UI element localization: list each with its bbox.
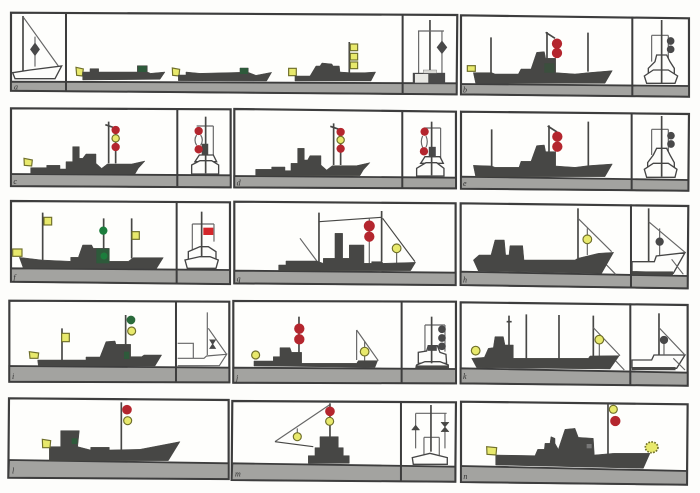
- panel g: ship with two red balls and yellow ball: [234, 202, 456, 285]
- front view: [632, 208, 685, 275]
- front view: [644, 20, 678, 83]
- panel n: ship with yellow flag, signal balls and bow burst: n: [463, 472, 467, 481]
- vessel silhouette: [275, 403, 349, 463]
- red balls: [364, 221, 374, 241]
- ship silhouette: [279, 211, 416, 271]
- boat silhouette: [49, 402, 180, 461]
- green ball: [100, 227, 107, 234]
- front view: [192, 117, 219, 174]
- panel h: ship with yellow ball: [461, 203, 688, 288]
- panel a: sailing vessel, tow and front view: a: [14, 82, 18, 91]
- panel i: ship with flags and green and yellow balls: i: [12, 372, 14, 381]
- yellow flags: [29, 333, 69, 358]
- panel f: ship with yellow flags and green ball: f: [13, 273, 17, 282]
- panel n: ship with yellow flag, signal balls and bow burst: [461, 402, 688, 485]
- signal balls: [609, 405, 620, 426]
- panel m: stepped vessel with derrick, balls and front view: m: [235, 470, 241, 479]
- yellow ball: [392, 244, 401, 253]
- yellow flags: [13, 217, 139, 256]
- yellow flag: [487, 447, 497, 455]
- front view: [644, 116, 677, 177]
- ship silhouette: [473, 208, 616, 274]
- front view: [416, 317, 448, 368]
- yellow flag: [24, 158, 32, 166]
- panel k: four-masted ship with yellow balls: [461, 302, 688, 386]
- ship silhouette: [38, 315, 162, 366]
- red balls: [553, 132, 562, 151]
- yellow balls: [252, 347, 369, 359]
- signal balls: [112, 126, 119, 151]
- panel c: ship with red, yellow, red balls and flag: [11, 108, 231, 187]
- sailing boat with diamond shape: [13, 16, 62, 79]
- signal balls: [123, 405, 132, 425]
- red balls: [295, 324, 304, 344]
- panel m: stepped vessel with derrick, balls and front view: [232, 401, 456, 482]
- panel l: fishing boat with red and yellow balls: l: [12, 467, 15, 476]
- front view: [185, 212, 218, 268]
- panel i: ship with flags and green and yellow balls: [9, 301, 229, 382]
- panel f: ship with yellow flags and green ball: [11, 201, 230, 284]
- front view: [417, 122, 444, 176]
- yellow ball: [583, 235, 592, 244]
- panel g: ship with two red balls and yellow ball: g: [237, 275, 241, 284]
- tow: second vessel: [172, 68, 272, 81]
- panel b: ship with two red balls and yellow flag: [461, 15, 689, 97]
- panel b: ship with two red balls and yellow flag: b: [463, 86, 467, 95]
- tow: first vessel: [76, 66, 165, 80]
- front view: [178, 312, 227, 366]
- signal balls: [337, 128, 344, 152]
- panel k: four-masted ship with yellow balls: k: [463, 372, 467, 381]
- panel l: fishing boat with red and yellow balls: [8, 398, 229, 479]
- ship silhouette: [496, 404, 650, 468]
- signal balls: [127, 316, 136, 335]
- ship silhouette: [254, 317, 378, 367]
- ship silhouette: [472, 314, 624, 370]
- front view: [412, 405, 449, 464]
- yellow burst at bow: [645, 442, 658, 453]
- front view with diamond shape: [413, 20, 447, 83]
- signal balls: [293, 407, 334, 441]
- panel a: sailing vessel, tow and front view: [11, 13, 457, 94]
- red balls: [552, 39, 562, 58]
- panel d: ship with red, yellow, red balls: d: [237, 178, 242, 187]
- tow: third vessel with three flags: [289, 42, 376, 81]
- panel d: ship with red, yellow, red balls: [234, 109, 456, 188]
- front view: [632, 313, 685, 370]
- ship silhouette: [473, 122, 612, 177]
- yellow flag: [42, 439, 51, 448]
- panel j: ship with yellow and red balls: [233, 301, 456, 383]
- yellow balls: [471, 335, 604, 355]
- panel e: ship with two red balls: e: [463, 179, 467, 188]
- panel c: ship with red, yellow, red balls and flag: c: [13, 177, 17, 186]
- ship silhouette: [31, 122, 145, 174]
- yellow flag: [467, 66, 475, 71]
- ship silhouette: [19, 213, 163, 268]
- panel j: ship with yellow and red balls: j: [235, 373, 239, 382]
- panel e: ship with two red balls: [461, 112, 689, 191]
- panel h: ship with yellow ball: h: [463, 275, 467, 284]
- ship silhouette: [473, 32, 612, 83]
- ship silhouette: [256, 123, 370, 176]
